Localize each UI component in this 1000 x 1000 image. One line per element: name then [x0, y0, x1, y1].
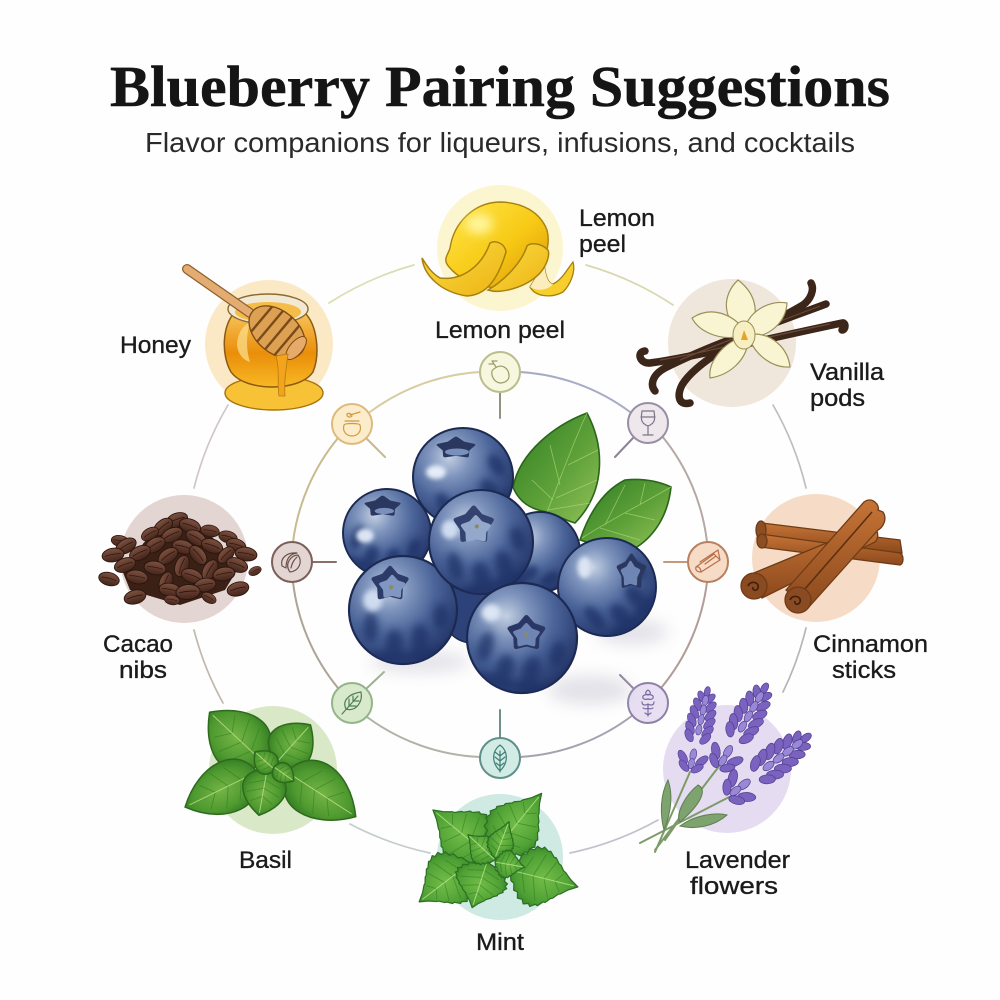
outer ring connecting ingredients	[194, 265, 806, 853]
label: Lemon peel top: peel	[579, 231, 626, 258]
subtitle: Flavor companions for liqueurs, infusions, and cocktails	[145, 127, 855, 158]
label: Vanilla pods: pods	[810, 385, 865, 412]
ingredient: honey	[187, 269, 333, 410]
label: Basil: Basil	[239, 847, 292, 874]
berry: behind right	[515, 511, 580, 591]
node icon: cacao	[272, 542, 312, 582]
label: Cinnamon sticks: Cinnamon	[813, 631, 928, 658]
node icon: honey	[332, 404, 372, 444]
label: Cacao nibs: nibs	[119, 657, 167, 684]
leaf: large	[513, 413, 600, 523]
label: Lemon peel top: Lemon	[579, 205, 655, 232]
ingredient: vanilla pods	[640, 279, 845, 407]
label: Cacao nibs: Cacao	[103, 631, 173, 658]
berry: right	[557, 537, 657, 637]
berry: top	[412, 427, 514, 518]
leaf: small	[580, 479, 671, 547]
ingredient: cacao nibs	[97, 495, 263, 623]
berry: lower left	[349, 556, 457, 664]
label: Lavender flowers: Lavender	[685, 847, 790, 874]
node icon: wine glass	[628, 403, 668, 443]
label: Lavender flowers: flowers	[690, 873, 778, 900]
ingredient: lemon peel	[422, 185, 574, 311]
label: Cinnamon sticks: sticks	[832, 657, 896, 684]
ingredient: basil	[174, 691, 371, 839]
inner ring and spokes	[293, 372, 707, 757]
ingredient: cinnamon sticks	[741, 494, 903, 622]
berry: under	[442, 581, 504, 643]
label: Lemon peel: Lemon peel	[435, 317, 565, 344]
ingredient: mint	[402, 775, 585, 925]
title: Blueberry Pairing Suggestions	[110, 54, 890, 119]
node icon: mint leaf	[480, 738, 520, 778]
berry: bottom	[467, 583, 577, 703]
infographic canvas	[98, 65, 927, 950]
label: Vanilla pods: Vanilla	[810, 359, 885, 386]
ingredient: lavender flowers	[640, 673, 824, 852]
node icon: cinnamon	[688, 542, 728, 582]
node icon: basil leaf	[332, 683, 372, 723]
label: Mint: Mint	[476, 929, 524, 956]
ground shadows	[370, 620, 668, 704]
berry: left	[342, 488, 431, 572]
berry: center	[429, 490, 537, 602]
node icon: lavender	[628, 683, 668, 723]
blueberries and leaves	[341, 413, 671, 704]
label: Honey: Honey	[120, 332, 191, 359]
calyx	[439, 438, 473, 456]
node icon: lemon	[480, 352, 520, 392]
